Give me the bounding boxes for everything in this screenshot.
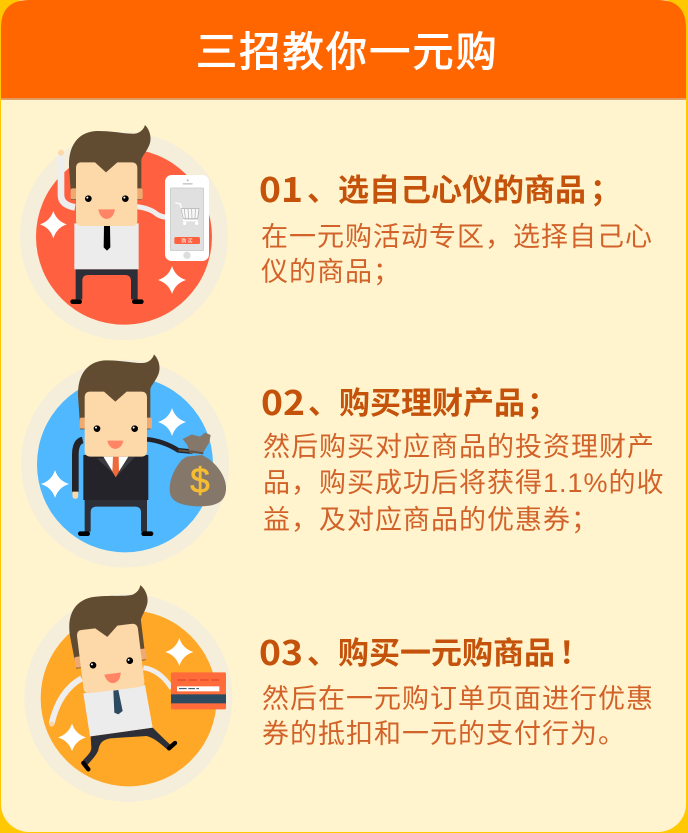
step number 03: 03: [259, 626, 303, 675]
text block: step 1: [259, 163, 653, 287]
icon: smartphone with cart: [165, 175, 209, 261]
body: step 1: 仪的商品；: [261, 257, 401, 287]
text block: step 3: [259, 626, 654, 749]
body: step 3: 券的抵扣和一元的支付行为。: [262, 719, 626, 749]
icon: smartphone with cart: 购 买: [181, 237, 193, 244]
icon: bank card: [171, 672, 226, 709]
icon: sparkle right: [158, 408, 186, 436]
step number 01: 01: [259, 163, 303, 212]
panel: step 3 illustration: [24, 585, 232, 802]
icon: sparkle right: [158, 266, 186, 294]
heading: step 1: 、选自己心仪的商品；: [307, 173, 621, 208]
heading: step 3: 、购买一元购商品！: [307, 636, 590, 671]
icon: money bag: [170, 433, 226, 506]
body: step 1: 在一元购活动专区，选择自己心: [261, 222, 653, 252]
body: step 1: [261, 222, 653, 287]
text block: step 2: [261, 376, 665, 535]
panel: step 1 illustration: [20, 125, 228, 340]
icon: money bag: $: [190, 462, 210, 501]
businessman with raised arm: [58, 125, 168, 304]
icon: sparkle left: [41, 470, 69, 498]
icon: sparkle left: [40, 211, 67, 238]
header band: [1, 0, 686, 100]
businessman in suit: [72, 354, 193, 536]
body: step 2: 然后购买对应商品的投资理财产: [263, 432, 655, 462]
running businessman: [49, 585, 175, 769]
body: step 3: 然后在一元购订单页面进行优惠: [262, 684, 654, 714]
body: step 2: [263, 432, 665, 535]
title: 三招教你一元购: [196, 29, 499, 75]
heading: step 2: 、购买理财产品；: [308, 386, 558, 421]
body: step 3: [262, 684, 654, 749]
body: step 2: 品，购买成功后将获得1.1%的收: [263, 468, 665, 498]
panel: step 2 illustration: [21, 354, 229, 568]
icon: sparkle top: [165, 638, 193, 666]
icon: sparkle bottom: [58, 723, 86, 751]
body: step 2: 益，及对应商品的优惠券；: [263, 505, 599, 535]
step number 02: 02: [261, 376, 305, 425]
